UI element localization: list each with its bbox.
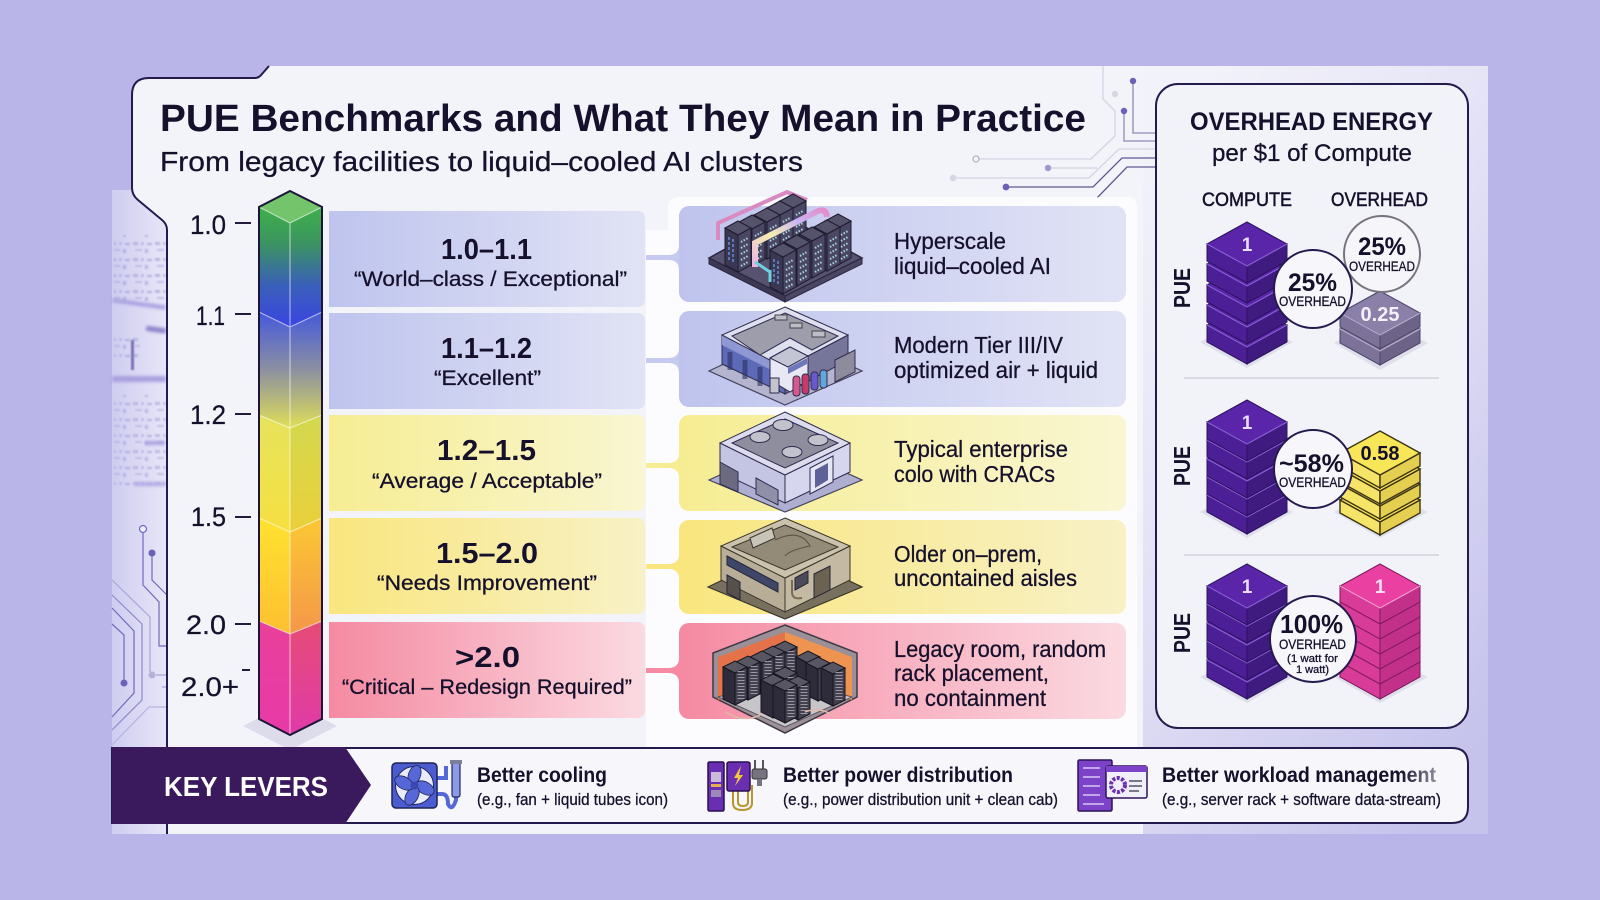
column headers: COMPUTE [1202,190,1292,211]
compute stack: 1 [1242,235,1253,256]
PUE scale labels: 2.0 [186,610,226,640]
facility row: older on-prem: uncontained aisles [894,565,1077,591]
column headers [1202,190,1428,211]
comparison: 58 percent overhead [1169,400,1428,538]
panel: key levers [112,747,1468,824]
row 1 connector [646,245,679,270]
lever: better cooling: (e.g., fan + liquid tubes icon) [477,790,668,809]
key levers banner arrow: KEY LEVERS [164,771,328,802]
icon: modern data center building [709,307,862,405]
facility row: hyperscale: liquid–cooled AI [894,253,1051,279]
lever: better power distribution [708,760,1058,811]
facility row: older on-prem: Older on–prem, [894,541,1042,567]
benchmark band: 1.2–1.5 [329,415,645,511]
left decorative data strip [112,190,172,834]
lever: better workload management: Better workload management [1162,764,1436,787]
lever: better workload management: (e.g., server rack + software data-stream) [1162,790,1441,809]
facility row: hyperscale: Hyperscale [894,228,1006,254]
icon: enterprise colo building [709,412,862,512]
main panel [132,66,1143,834]
compute stack [1207,222,1287,364]
lever: better cooling: Better cooling [477,764,607,787]
overhead bubble: OVERHEAD [1279,294,1346,309]
comparison: 100 percent overhead: PUE [1169,613,1195,653]
icon: server rack and software window [1078,760,1147,811]
facility row: legacy room [679,623,1126,733]
comparison: 58 percent overhead: PUE [1169,446,1195,486]
lever: better power distribution: (e.g., power distribution unit + clean cab) [783,790,1058,809]
key levers banner arrow [112,747,371,824]
benchmark band: >2.0 [329,622,645,718]
facility row: typical enterprise: Typical enterprise [894,436,1068,462]
icon: power distribution unit [708,760,767,811]
facility row: legacy room: rack placement, [894,660,1049,686]
compute stack: 1 [1242,413,1253,434]
PUE scale labels: 1.5 [191,502,226,532]
top right circuit decoration [950,66,1156,198]
title: PUE Benchmarks and What They Mean in Practice [160,98,1086,140]
benchmark band: >2.0: “Critical – Redesign Required” [342,676,632,699]
main panel outline [132,66,269,834]
overhead stack: 0.25 [1361,304,1399,326]
PUE scale labels: 1.0 [190,210,226,240]
PUE scale labels: 1.1 [196,301,225,331]
benchmark band: 1.1–1.2: 1.1–1.2 [441,333,532,365]
overhead stack [1340,291,1420,365]
facility row: modern tier [679,307,1126,407]
lever: better workload management [1078,760,1441,811]
benchmark band: 1.1–1.2 [329,313,645,409]
facility row: legacy room: Legacy room, random [894,636,1106,662]
benchmark band: 1.0–1.1: 1.0–1.1 [441,234,532,266]
facility row: legacy room: no containment [894,685,1047,711]
subtitle: From legacy facilities to liquid–cooled AI clusters [160,146,803,177]
facility row: typical enterprise: colo with CRACs [894,461,1055,487]
overhead bubble [1274,430,1352,508]
comparison: 25 percent overhead [1169,216,1428,370]
overhead bubble: 25% [1288,269,1337,297]
row 2 connector [646,348,679,373]
white backing for facility rows [646,197,1137,748]
row 5 connector [646,658,679,683]
icon: fan and liquid tubes [392,760,462,808]
overhead bubble: (1 watt for [1287,653,1338,665]
overhead stack [1340,431,1420,535]
panel heading: per $1 of Compute [1212,140,1412,167]
benchmark band: 1.0–1.1 [329,211,645,307]
benchmark band: 1.5–2.0: “Needs Improvement” [377,572,597,595]
PUE scale labels [181,210,251,702]
overhead bubble top: OVERHEAD [1349,259,1415,274]
overhead bubble [1270,596,1356,682]
benchmark band: 1.0–1.1: “World–class / Exceptional” [354,268,627,291]
overhead stack [1340,564,1420,699]
right background panel [1143,66,1488,834]
column headers: OVERHEAD [1331,190,1428,211]
PUE scale labels: 1.2 [190,400,226,430]
benchmark band: 1.1–1.2: “Excellent” [434,367,541,390]
panel heading [1190,108,1433,167]
benchmark band: 1.2–1.5: 1.2–1.5 [437,435,536,467]
panel heading: OVERHEAD ENERGY [1190,108,1433,136]
facility row: modern tier: Modern Tier III/IV [894,332,1064,358]
comparison: 25 percent overhead: PUE [1169,268,1195,308]
facility row: modern tier: optimized air + liquid [894,357,1098,383]
overhead bubble: ~58% [1279,450,1344,478]
compute stack: 1 [1242,577,1253,598]
PUE scale labels: 2.0+ [181,672,239,702]
overhead bubble top: 25% [1358,233,1406,261]
row 4 connector [646,554,679,579]
overhead stack: 1 [1375,577,1386,598]
overhead bubble: OVERHEAD [1279,475,1346,490]
icon: liquid-cooled racks on platform [709,192,862,302]
facility row: older on-prem [679,518,1126,619]
benchmark band: 1.2–1.5: “Average / Acceptable” [372,470,602,493]
row 3 connector [646,453,679,478]
overhead bubble top [1344,216,1420,292]
facility row: typical enterprise [679,412,1126,512]
overhead bubble [1274,250,1352,328]
lever: better cooling [392,760,668,809]
icon: older brick building [708,518,862,619]
icon: legacy server room [713,625,857,733]
compute stack [1207,564,1287,699]
facility row: hyperscale [679,192,1126,302]
benchmark band: >2.0: >2.0 [455,642,520,674]
panel: overhead energy [1156,84,1468,728]
overhead stack: 0.58 [1361,443,1399,465]
overhead bubble: OVERHEAD [1279,637,1346,652]
benchmark band: 1.5–2.0 [329,518,645,614]
lever: better power distribution: Better power distribution [783,764,1013,787]
overhead bubble: 1 watt) [1296,664,1329,676]
benchmark band: 1.5–2.0: 1.5–2.0 [436,538,538,570]
comparison: 100 percent overhead [1169,564,1428,703]
overhead bubble: 100% [1280,609,1343,639]
gradient PUE column [243,191,337,750]
compute stack [1207,400,1287,534]
